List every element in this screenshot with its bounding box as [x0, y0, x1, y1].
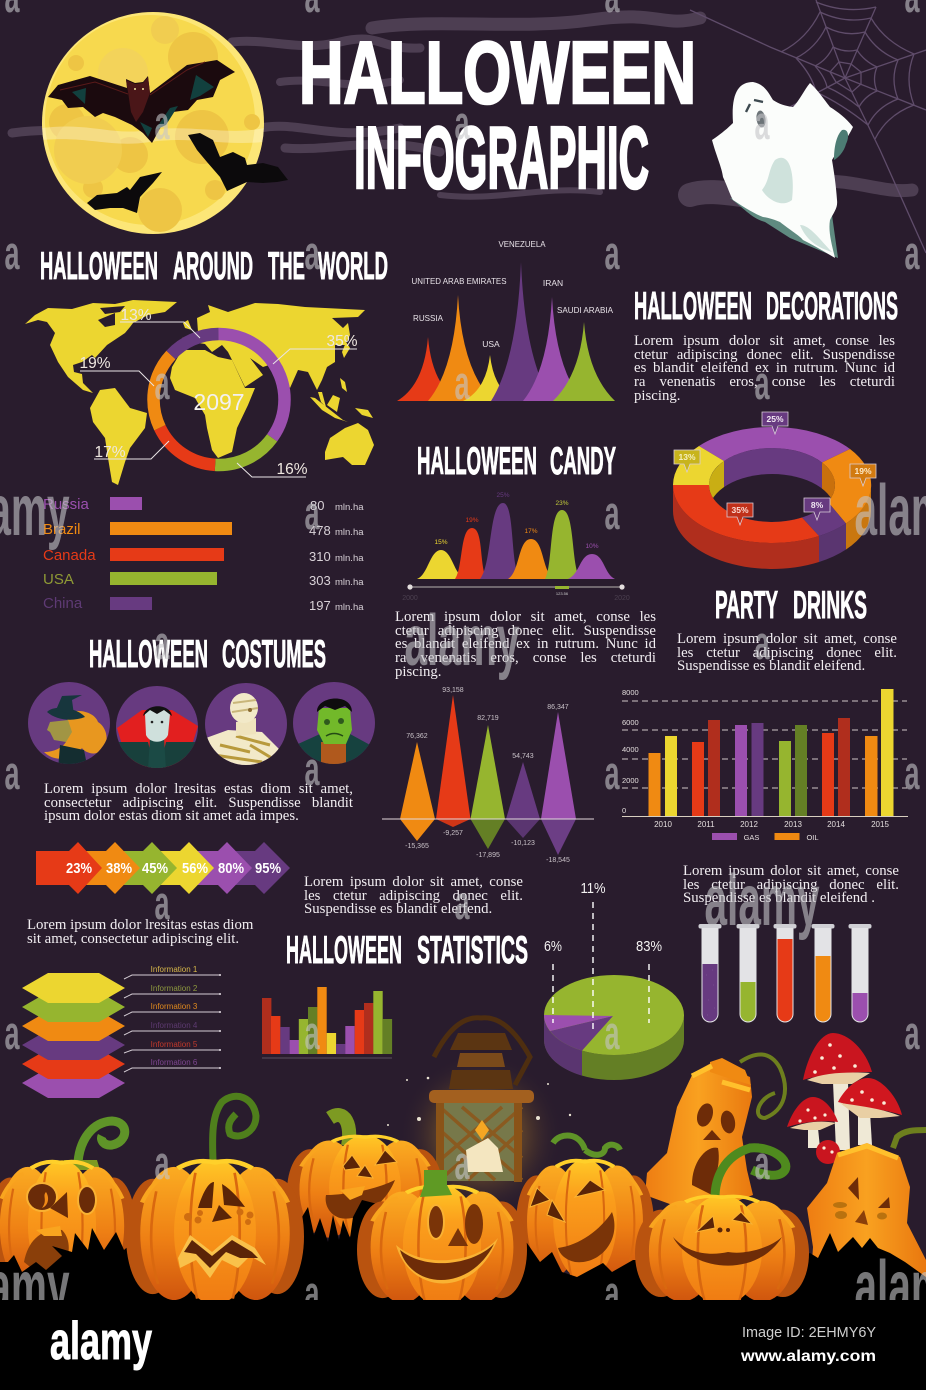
bell chart: 17%: [524, 528, 538, 535]
spike chart: -18,545: [546, 857, 570, 864]
bar chart: gas and oil: 2011: [697, 820, 715, 829]
bar chart: gas and oil: 0: [622, 806, 626, 815]
text: candy: [395, 609, 656, 680]
ring callouts: [674, 412, 876, 525]
footer band: [0, 1300, 926, 1390]
country bars: Russia: [43, 496, 90, 513]
layered hexagon stack: Information 5: [151, 1040, 198, 1049]
pumpkin: far left: [0, 1116, 132, 1272]
heading: party drinks: PARTY: [715, 584, 778, 627]
spike chart: -17,895: [476, 852, 500, 859]
text: party drinks: [677, 631, 897, 674]
heading: statistics: STATISTICS: [417, 929, 528, 972]
chart legend: GAS: [744, 833, 759, 842]
country bars: 310: [309, 549, 331, 564]
spike chart: -9,257: [443, 830, 463, 837]
spike chart: 82,719: [477, 715, 499, 722]
donut callouts: 19%: [79, 355, 111, 372]
country bars: mln.ha: [335, 602, 364, 613]
3D pie chart: [544, 880, 684, 1080]
ring callouts: 25%: [766, 414, 784, 424]
watermark overlay: a: [754, 96, 770, 149]
tube: purple: [698, 924, 722, 1022]
gourd right: [807, 1130, 926, 1290]
text: decorations: piscing.: [634, 388, 680, 404]
country bars: Brazil: [43, 521, 81, 538]
watermark overlay: alamy: [704, 861, 820, 941]
country bars: mln.ha: [335, 553, 364, 564]
cloud bands: [12, 17, 912, 198]
3D ring chart: [673, 412, 876, 569]
3D pie chart: 6%: [544, 938, 562, 955]
spike chart: 54,743: [512, 753, 534, 760]
country bars: 478: [309, 523, 331, 538]
watermark overlay: a: [4, 746, 20, 799]
text: costumes: Lorem ipsum dolor lresitas estas diom sit amet,: [44, 781, 353, 797]
icon: ghost: [712, 82, 853, 258]
text: statistics: Suspendisse es blandit eleifend.: [304, 901, 492, 917]
icon: witch: [28, 682, 110, 770]
donut callouts: 17%: [94, 444, 126, 461]
icon: frankenstein: [293, 682, 375, 770]
timeline slider: 2020: [614, 595, 630, 602]
donut total: 2097: [193, 389, 245, 415]
watermark overlay: a: [604, 1006, 620, 1059]
watermark overlay: a: [604, 226, 620, 279]
image id: Image ID: 2EHMY6Y: [742, 1324, 876, 1341]
spike chart: -10,123: [511, 840, 535, 847]
watermark overlay: a: [154, 876, 170, 929]
watermark overlay: a: [754, 1136, 770, 1189]
bar chart: gas and oil: 8000: [622, 688, 639, 697]
bar chart: gas and oil: 4000: [622, 745, 639, 754]
3D pie chart: 11%: [580, 880, 606, 897]
bell chart: [402, 492, 630, 602]
3D pie chart: 83%: [636, 938, 662, 955]
peak chart: [397, 239, 615, 401]
bar chart: gas and oil: 2000: [622, 776, 639, 785]
text: costumes: ipsum dolor estas diom sit amet ada impes.: [44, 808, 299, 824]
tube: light purple: [848, 924, 872, 1022]
bar chart: gas and oil: [622, 688, 908, 842]
spike chart: -15,365: [405, 843, 429, 850]
tall gourd: [645, 1054, 785, 1215]
watermark overlay: a: [604, 1266, 620, 1319]
timeline slider: 2000: [402, 595, 418, 602]
title: HALLOWEEN: [299, 23, 696, 122]
costume portraits: [28, 682, 375, 770]
ring callouts: 35%: [731, 505, 749, 515]
icon: mushrooms: [787, 1033, 902, 1164]
watermark overlay: alamy: [404, 601, 520, 681]
text: statistics: les ctetur adipiscing donec elit.: [304, 888, 523, 904]
watermark overlay: a: [454, 96, 470, 149]
watermark overlay: a: [154, 616, 170, 669]
peak chart: UNITED ARAB EMIRATES: [412, 276, 507, 286]
watermark overlay: a: [304, 1006, 320, 1059]
bar chart: gas and oil: 2012: [740, 820, 758, 829]
text: statistics: Lorem ipsum dolor sit amet, conse: [304, 874, 523, 890]
watermark overlay: a: [154, 356, 170, 409]
bell chart: 23%: [555, 500, 569, 507]
text: party drinks: Lorem ipsum dolor sit amet, conse: [677, 631, 897, 647]
country bars: mln.ha: [335, 577, 364, 588]
ring callouts: 8%: [811, 500, 824, 510]
watermark overlay: a: [154, 1136, 170, 1189]
pumpkin: front centre: [357, 1170, 527, 1307]
text: progress: Lorem ipsum dolor lresitas estas diom: [27, 917, 253, 933]
spike chart: [382, 687, 594, 864]
tube: green: [736, 924, 760, 1022]
text: costumes: [44, 781, 353, 824]
spike chart: 86,347: [547, 704, 569, 711]
icon: large bat: [48, 60, 235, 143]
country bars: mln.ha: [335, 502, 364, 513]
donut chart: [154, 334, 284, 465]
peak chart: RUSSIA: [413, 313, 443, 323]
text: progress: [27, 917, 254, 947]
donut callouts: 16%: [276, 461, 308, 478]
country bars: USA: [43, 571, 74, 588]
heading: around the world: HALLOWEEN: [40, 245, 158, 288]
country bars: mln.ha: [335, 527, 364, 538]
text: decorations: Lorem ipsum dolor sit amet, conse les: [634, 333, 895, 349]
progress arrows: 38%: [106, 860, 132, 877]
watermark overlay: a: [304, 742, 320, 795]
pumpkin: large left: [126, 1096, 304, 1305]
peak chart: VENEZUELA: [498, 239, 546, 249]
progress arrows: 95%: [255, 860, 281, 877]
icon: vampire: [116, 686, 198, 770]
heading: candy: HALLOWEEN: [417, 440, 537, 483]
text: test tubes: les ctetur adipiscing donec elit.: [683, 877, 899, 893]
donut callouts: 35%: [326, 333, 358, 350]
icon: mummy: [205, 683, 287, 770]
watermark overlay: a: [304, 1266, 320, 1319]
text: candy: Lorem ipsum dolor sit amet, conse les: [395, 609, 656, 625]
text: candy: piscing.: [395, 664, 441, 680]
watermark overlay: a: [754, 356, 770, 409]
layered hexagon stack: Information 1: [151, 965, 198, 974]
text: decorations: ra venenatis eros, conse les cteturdi: [634, 374, 895, 390]
country bars: [43, 496, 364, 613]
pumpkin: back centre: [287, 1115, 443, 1241]
text: candy: ctetur adipiscing donec elit. Suspendisse: [395, 623, 656, 639]
icon: spider web: [690, 0, 926, 253]
icon: bat right: [188, 133, 288, 191]
world map with donut: [25, 300, 374, 485]
pumpkin: back right: [516, 1135, 654, 1281]
text: costumes: consectetur adipiscing elit. Suspendisse blandit: [44, 795, 353, 811]
chart legend: [712, 833, 819, 842]
timeline slider: [402, 584, 630, 602]
bar chart: gas and oil: 2013: [784, 820, 802, 829]
layered hexagon stack: Information 3: [151, 1002, 198, 1011]
graphics layer: CANDY: [550, 440, 616, 483]
text: progress: sit amet, consectetur adipiscing elit.: [27, 931, 239, 947]
bar chart: gas and oil: 6000: [622, 718, 639, 727]
pumpkin: front right: [635, 1148, 809, 1305]
graphics layer: COSTUMES: [222, 633, 326, 676]
donut callouts: 13%: [120, 307, 152, 324]
footer url: www.alamy.com: [740, 1348, 876, 1365]
watermark overlay: a: [454, 1136, 470, 1189]
country bars: 197: [309, 598, 331, 613]
donut callouts: [79, 307, 358, 478]
progress arrows: 80%: [218, 860, 244, 877]
watermark overlay: a: [604, 486, 620, 539]
watermark overlay: a: [454, 356, 470, 409]
text: party drinks: Suspendisse es blandit eleifend.: [677, 658, 865, 674]
bar chart: gas and oil: 2010: [654, 820, 672, 829]
country bars: China: [43, 595, 83, 612]
bar chart: gas and oil: 2014: [827, 820, 845, 829]
country bars: 80: [310, 498, 324, 513]
text: decorations: ctetur adipiscing donec elit. Suspendisse: [634, 347, 895, 363]
layered hexagon stack: Information 6: [151, 1058, 198, 1067]
footer logo: alamy: [50, 1312, 152, 1371]
text: decorations: [634, 333, 895, 404]
heading: costumes: HALLOWEEN: [89, 633, 208, 676]
tube: orange: [812, 924, 834, 1022]
spike chart: 93,158: [442, 687, 464, 694]
bell chart: 10%: [585, 543, 599, 550]
icon: lantern: [416, 1015, 546, 1198]
watermark overlay: a: [4, 226, 20, 279]
watermark overlay: a: [604, 746, 620, 799]
heading: statistics: HALLOWEEN: [286, 929, 402, 972]
peak chart: IRAN: [543, 278, 563, 288]
moon with bats: [42, 12, 288, 234]
ring callouts: 19%: [854, 466, 872, 476]
watermark overlay: a: [754, 616, 770, 669]
watermark overlay: a: [454, 876, 470, 929]
layered hexagon stack: [22, 965, 221, 1098]
watermark overlay: a: [304, 486, 320, 539]
progress arrows: 56%: [182, 860, 208, 877]
text: decorations: es blandit eleifend ex in rutrum. Nunc id: [634, 360, 895, 376]
text: candy: ra venenatis eros, conse les cteturdi: [395, 650, 656, 666]
heading: around the world: AROUND: [173, 245, 253, 288]
layered hexagon stack: Information 4: [151, 1021, 198, 1030]
heading: decorations: HALLOWEEN: [634, 285, 752, 328]
bell chart: 19%: [465, 517, 479, 524]
title: [299, 23, 696, 207]
statistics bars: [262, 987, 392, 1058]
progress arrows: 45%: [142, 860, 168, 877]
watermark overlay: a: [4, 1006, 20, 1059]
ring callouts: 13%: [678, 452, 696, 462]
chart legend: OIL: [806, 833, 819, 842]
map continents: [25, 300, 374, 485]
test tubes: [698, 924, 872, 1022]
progress arrows: 23%: [66, 860, 92, 877]
peak chart: USA: [482, 339, 500, 349]
pumpkin scene: [0, 1018, 926, 1307]
tube: red: [774, 924, 796, 1022]
grass silhouette: [0, 1200, 926, 1300]
peak chart: SAUDI ARABIA: [557, 305, 613, 315]
text: test tubes: Suspendisse es blandit eleifend .: [683, 890, 875, 906]
bell chart: 15%: [434, 539, 448, 546]
layered hexagon stack: Information 2: [151, 984, 198, 993]
text: test tubes: Lorem ipsum dolor sit amet, conse: [683, 863, 899, 879]
stars and sparks: [387, 1077, 571, 1126]
progress arrows: [36, 842, 290, 894]
heading: around the world: THE: [268, 245, 305, 288]
text: party drinks: les ctetur adipiscing donec elit.: [677, 645, 897, 661]
timeline slider: 123.56: [556, 591, 569, 596]
graphics layer: WORLD: [318, 245, 388, 288]
bar chart: gas and oil: 2015: [871, 820, 889, 829]
country bars: Canada: [43, 547, 96, 564]
icon: bat lower: [87, 172, 162, 213]
text: statistics: [304, 874, 523, 917]
country bars: 303: [309, 573, 331, 588]
watermark overlay: a: [154, 96, 170, 149]
text: test tubes: [683, 863, 899, 906]
bell chart: 25%: [496, 492, 510, 499]
spike chart: 76,362: [406, 733, 428, 740]
watermark overlay: a: [304, 226, 320, 279]
text: candy: es blandit eleifend ex in rutrum. Nunc id: [395, 636, 656, 652]
